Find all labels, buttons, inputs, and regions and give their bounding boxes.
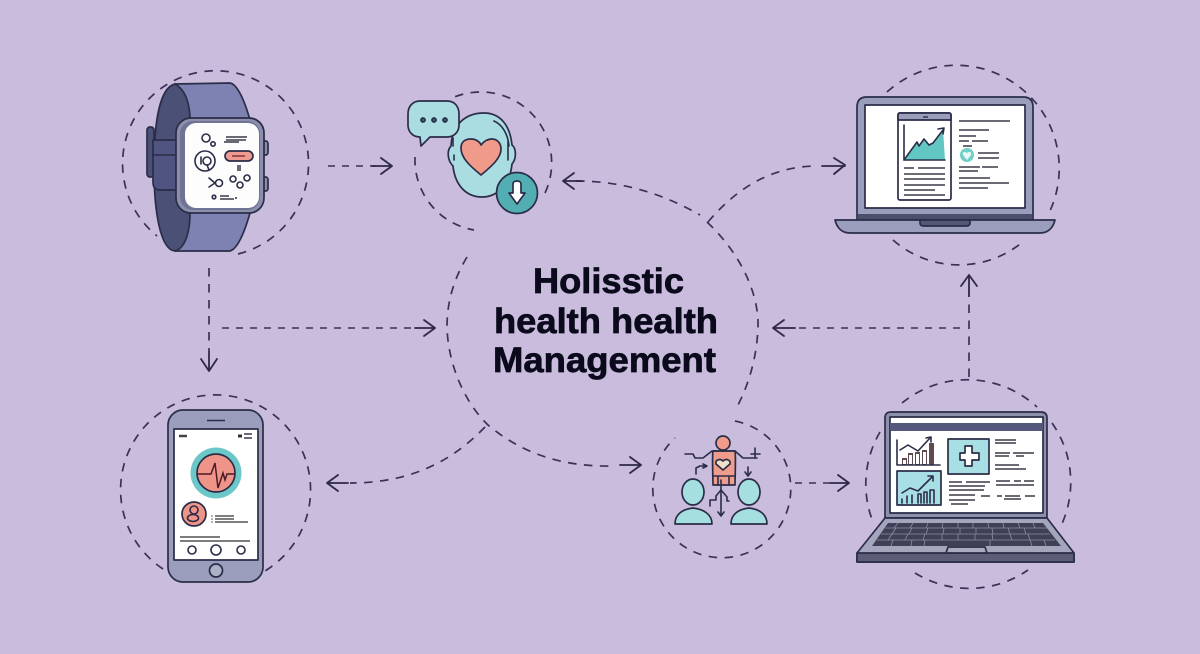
tablet with chart [898, 113, 951, 200]
line chart [897, 437, 940, 465]
title: health health [494, 302, 718, 341]
watch node [123, 71, 309, 254]
heart [461, 139, 501, 175]
lower laptop node [857, 380, 1074, 588]
arrow: watch to heart head [328, 158, 392, 174]
upper laptop node [835, 65, 1059, 265]
right person [731, 479, 767, 524]
medical cross card [948, 439, 989, 474]
arrow: watch to phone [201, 268, 217, 371]
keyboard base [857, 518, 1074, 562]
arrow: lower laptop to upper laptop [961, 275, 977, 377]
arrow: lower laptop to centre [773, 320, 960, 336]
arrow: centre to phone [327, 427, 485, 491]
arrow: centre to team [620, 457, 641, 473]
download badge [496, 172, 538, 214]
central dashed circle [447, 181, 758, 466]
arrow: watch to centre [222, 320, 435, 336]
title [493, 262, 718, 380]
watch screen [185, 123, 259, 208]
article text [959, 121, 1010, 188]
profile avatar [182, 502, 206, 526]
left person [675, 479, 712, 524]
phone node [121, 395, 311, 582]
care team node [653, 421, 791, 558]
title: Management [493, 341, 716, 380]
report text [949, 440, 1035, 504]
heart head node [408, 92, 552, 230]
arrow: centre to heart head [563, 173, 582, 189]
title: Holisstic [533, 262, 684, 301]
heart rate monitor [190, 448, 242, 498]
home button [210, 564, 222, 577]
patient figure [685, 436, 757, 485]
speech bubble [408, 101, 459, 146]
arrow: centre to upper laptop [708, 158, 845, 222]
arrow: team to lower laptop [795, 475, 849, 491]
connector arrows [696, 448, 760, 516]
teal chart card [897, 471, 941, 505]
